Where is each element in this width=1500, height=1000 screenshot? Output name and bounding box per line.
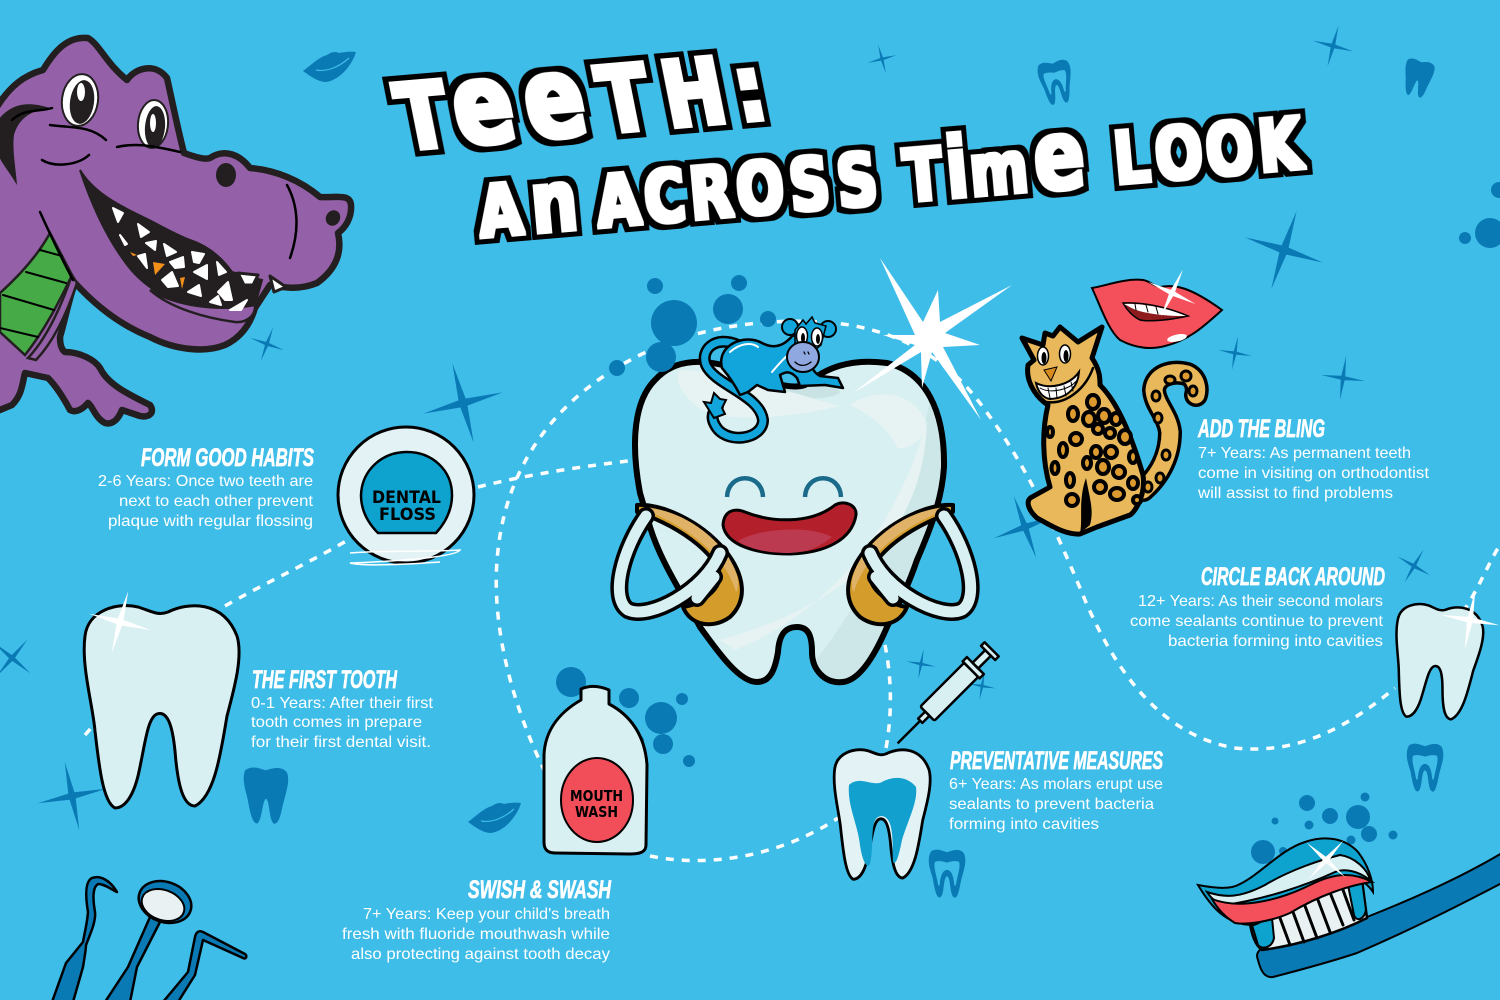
jaguar leg shadow: [1080, 478, 1092, 533]
right arm with floss: [848, 505, 971, 624]
title line 1: e: [440, 37, 525, 171]
heading: add the bling: will assist to find problems: [1197, 485, 1393, 502]
toothbrush handle: [1257, 853, 1500, 977]
heading: the first tooth: tooth comes in prepare: [251, 714, 422, 731]
dragon belly: [0, 233, 72, 355]
title line 2: C: [640, 155, 689, 241]
toothbrush with paste: [1198, 792, 1500, 977]
syringe icon: [889, 641, 1000, 752]
tooth shading: [678, 370, 941, 679]
heading: the first tooth: [251, 666, 434, 751]
title line 2: n: [526, 151, 582, 253]
bottle label text: WASH: [575, 803, 618, 821]
dental instruments: [52, 874, 246, 1000]
bottle label: [561, 758, 633, 842]
right floss loop: [870, 516, 971, 612]
tooth fill: [635, 362, 944, 682]
dragon mascot: [0, 38, 351, 423]
heading: add the bling: 7+ Years: As permanent teeth: [1198, 445, 1411, 462]
decorative bubbles right edge: [1459, 182, 1500, 248]
bottle body: [544, 686, 647, 854]
decorative blue stars: [0, 20, 1440, 838]
bottle label text: [570, 787, 623, 821]
lips teeth: [1124, 304, 1186, 316]
lips highlight: [1166, 332, 1188, 344]
heading: swish and swash: [342, 876, 612, 963]
decorative small lips: [303, 52, 521, 833]
heading: circle back around: come sealants continue to prevent: [1130, 613, 1384, 630]
title line 2: S: [786, 142, 833, 229]
title line 2: S: [833, 138, 881, 225]
jaguar tail: [1143, 373, 1197, 490]
title line 2: O: [733, 146, 788, 234]
left arm with floss: [619, 505, 742, 624]
heading: add the bling: ADD THE BLING: [1197, 415, 1325, 443]
heading: the first tooth: 0-1 Years: After their first: [251, 695, 434, 712]
explorer tool: [52, 877, 117, 1000]
red lips with sparkle: [1092, 258, 1222, 348]
dragon gold teeth: [130, 252, 185, 289]
bubbles above tooth: [609, 275, 776, 376]
floss label text: FLOSS: [379, 505, 436, 525]
title line 1: e: [511, 31, 596, 165]
tooth eyes: [727, 478, 841, 497]
heading: circle back around: 12+ Years: As their second molars: [1138, 593, 1383, 610]
monkey mascot: [704, 317, 843, 438]
heading: swish and swash: also protecting against tooth decay: [351, 946, 610, 963]
monkey highlights: [730, 344, 788, 372]
monkey face: [787, 342, 819, 372]
dragon mouth: [80, 170, 262, 313]
monkey head: [795, 317, 826, 350]
heading: preventative measures: forming into cavities: [949, 816, 1099, 833]
bristle head: [1250, 880, 1367, 950]
lips shape: [1092, 280, 1222, 348]
floss label text: [372, 488, 441, 525]
heading: preventative measures: [949, 747, 1163, 833]
angled probe tool: [163, 931, 246, 1000]
jaguar mascot: [1022, 327, 1197, 534]
title line 1: T: [388, 63, 458, 172]
mouthwash bubbles: [556, 667, 695, 767]
dragon hanging teeth: [238, 273, 286, 292]
title line 2: i: [941, 119, 972, 218]
paste sparkle: [1289, 823, 1363, 897]
title line 2: O: [1202, 107, 1257, 194]
mirror tool handle: [105, 917, 161, 1000]
heading: add the bling: [1197, 415, 1430, 502]
mouthwash bottle: [544, 667, 695, 854]
heading: preventative measures: sealants to prevent bacteria: [949, 796, 1154, 813]
lips opening: [1123, 303, 1188, 321]
paste white layer: [1207, 855, 1370, 905]
heading: circle back around: bacteria forming into cavities: [1168, 633, 1383, 650]
mirror tool head: [133, 874, 197, 930]
dragon back swoosh: [0, 104, 50, 185]
title line 1: H: [653, 39, 734, 149]
dragon teeth: [113, 208, 247, 310]
title line 2: L: [1110, 116, 1153, 202]
monkey body: [721, 335, 843, 395]
big sparkle on tooth: [853, 258, 1012, 420]
heading: circle back around: CIRCLE BACK AROUND: [1201, 563, 1385, 591]
heading: the first tooth: THE FIRST TOOTH: [252, 666, 398, 694]
jaguar nose: [1044, 367, 1057, 381]
heading: form good habits: next to each other prevent: [119, 493, 314, 510]
tooth tongue: [738, 529, 832, 553]
jaguar spots: [1047, 395, 1141, 506]
heading: form good habits: 2-6 Years: Once two teeth are: [98, 473, 313, 490]
floss strand: [350, 550, 460, 565]
paste blue layer: [1198, 838, 1373, 925]
title line 2: m: [966, 126, 1032, 214]
paste red layer: [1212, 875, 1372, 924]
floss case: [338, 427, 474, 563]
title line 2: e: [1028, 99, 1089, 214]
title line 2: A: [475, 168, 526, 255]
large first tooth: [81, 583, 239, 808]
title line 2: A: [593, 158, 644, 245]
title line 2: O: [1151, 111, 1207, 198]
jaguar smile with braces: [1036, 372, 1079, 399]
heading: circle back around: [1130, 563, 1385, 650]
monkey ears: [782, 319, 798, 335]
heading: preventative measures: PREVENTATIVE MEASURES: [950, 747, 1163, 775]
title line 2: K: [1254, 103, 1308, 190]
tooth mouth: [723, 503, 856, 554]
dental floss icon: [338, 427, 474, 565]
floss label text: DENTAL: [372, 488, 441, 508]
heading: add the bling: come in visiting on orthodontist: [1198, 465, 1430, 482]
floss label panel: [361, 452, 452, 533]
jaguar tail spots: [1144, 371, 1197, 492]
title line 2: T: [900, 133, 946, 219]
dragon body and head: [0, 38, 351, 423]
left floss loop: [619, 516, 720, 612]
monkey eyes: [796, 327, 822, 346]
tooth outline: [635, 362, 944, 682]
bristles: [1252, 880, 1366, 948]
molar with pulp: [834, 750, 930, 879]
right tooth with sparkle: [1389, 585, 1500, 723]
dashed timeline path: [85, 321, 1500, 861]
jaguar chin line: [1046, 368, 1093, 402]
heading: form good habits: [98, 444, 314, 530]
dragon nostrils and creases: [216, 163, 236, 187]
toothbrush bubbles: [1251, 792, 1398, 864]
title line 2: R: [686, 151, 736, 237]
dragon lower lip: [150, 290, 255, 322]
jaguar eyes: [1038, 345, 1070, 365]
monkey tail: [705, 342, 763, 438]
title line 1: T: [589, 46, 659, 154]
dragon eyes: [59, 72, 170, 149]
heading: the first tooth: for their first dental visit.: [251, 734, 431, 751]
central smiling tooth: [619, 362, 971, 700]
heading: form good habits: plaque with regular flossing: [108, 513, 313, 530]
heading: preventative measures: 6+ Years: As molars erupt use: [949, 776, 1163, 793]
left gold hook: [637, 505, 742, 624]
heading: swish and swash: fresh with fluoride mouthwash while: [342, 926, 610, 943]
decorative small teeth: [244, 57, 1443, 898]
title: [384, 16, 1308, 261]
right gold hook: [848, 505, 953, 624]
heading: swish and swash: SWISH & SWASH: [468, 876, 612, 904]
bottle label text: MOUTH: [570, 787, 623, 805]
jaguar body: [1022, 327, 1144, 534]
heading: swish and swash: 7+ Years: Keep your child's breath: [363, 906, 610, 923]
title line 1: :: [724, 36, 774, 143]
heading: form good habits: FORM GOOD HABITS: [141, 444, 314, 472]
